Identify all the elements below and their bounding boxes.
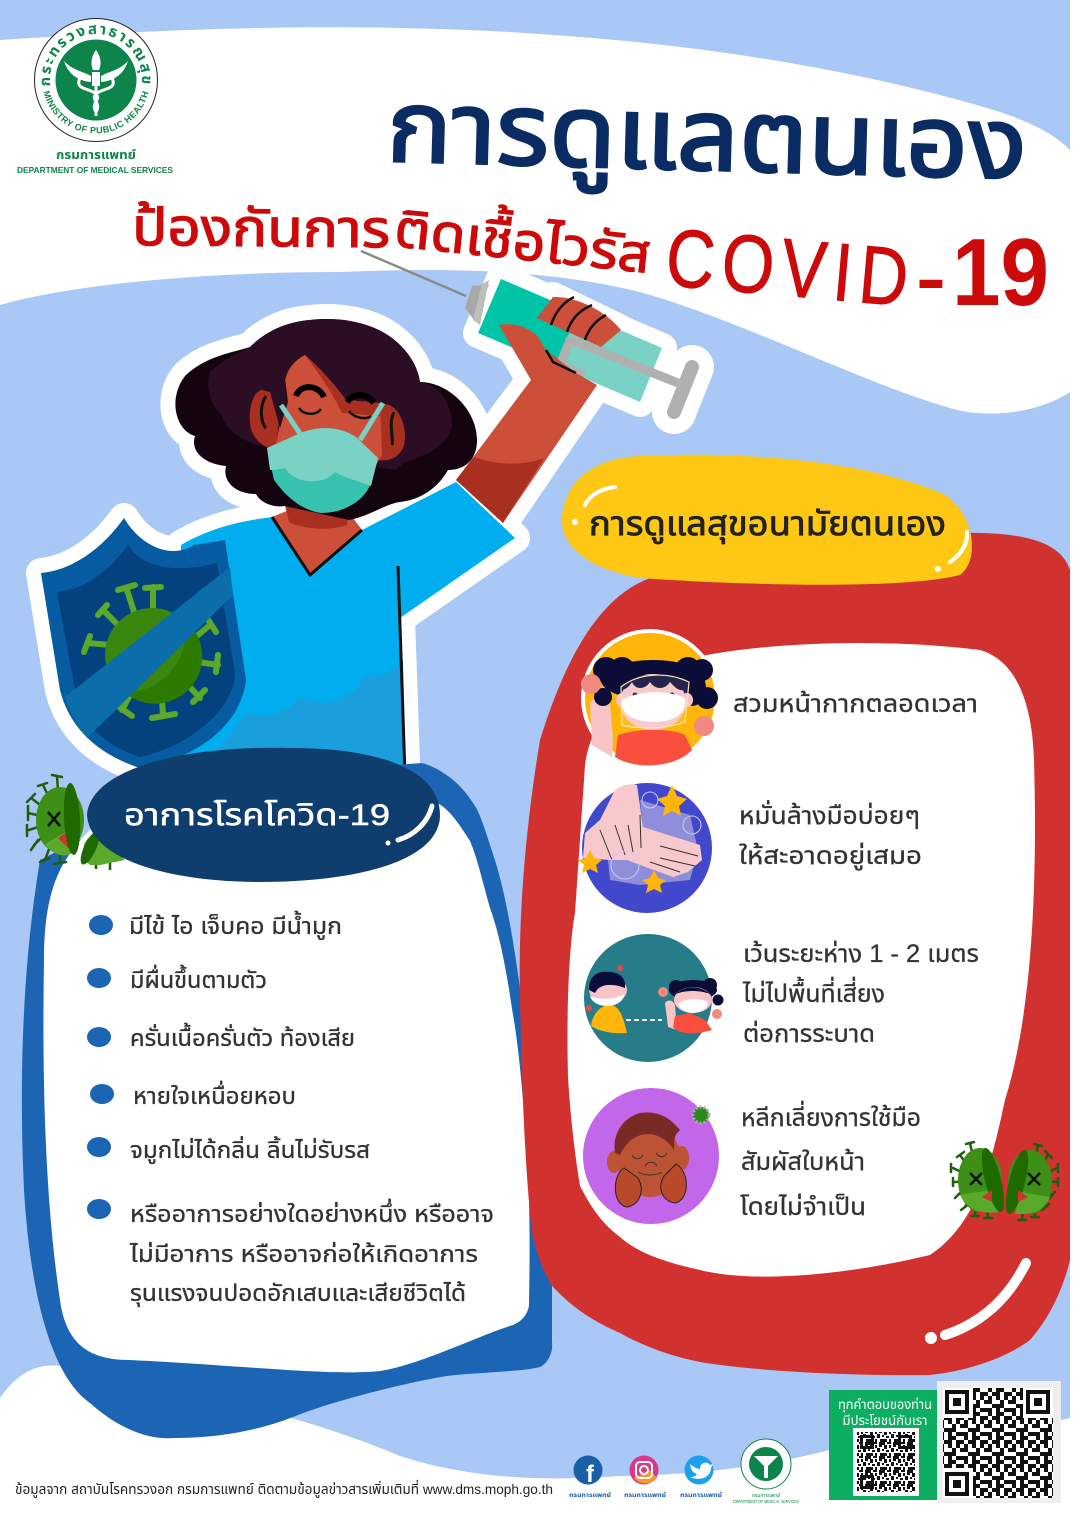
symptom 2: มีผื่นขึ้นตามตัว	[130, 964, 267, 993]
text: wash hands: ให้สะอาดอยู่เสมอ	[739, 842, 922, 871]
text: social distance: ไม่ไปพื้นที่เสี่ยง	[742, 976, 885, 1008]
text: avoid touching face	[740, 1100, 921, 1221]
symptom 1: มีไข้ ไอ เจ็บคอ มีน้ำมูก	[129, 910, 342, 941]
icon: syringe	[361, 251, 692, 412]
panel: white self-care card	[567, 643, 1035, 1277]
logo: ministry of public health: MINISTRY OF PUBLIC HEALTH	[44, 90, 148, 134]
title: main heading: การดูแลตนเอง	[385, 71, 1028, 206]
heading: symptoms	[87, 748, 440, 882]
heading: self-care pill: การดูแลสุขอนามัยตนเอง	[589, 505, 946, 544]
text: social distance: ต่อการระบาด	[743, 1020, 875, 1048]
heading: self-care pill	[562, 455, 972, 585]
highlight stroke on red panel	[925, 1263, 1026, 1344]
QR: feedback green card: มีประโยชน์กับเรา	[842, 1413, 928, 1428]
symptom 1	[89, 910, 342, 941]
icon: social distance	[584, 934, 724, 1062]
title: number 19: 19	[952, 219, 1049, 326]
symptom 2	[87, 964, 267, 993]
text: avoid touching face: สัมผัสใบหน้า	[741, 1148, 865, 1176]
footer source text: ข้อมูลจาก สถาบันโรคทรวงอก กรมการแพทย์ ติดตามข้อมูลข่าวสารเพิ่มเติมที่ www.dms.moph.go.th	[15, 1479, 553, 1498]
panel: red self-care background	[520, 533, 1070, 1375]
icon: face mask	[267, 403, 383, 513]
symptom 6	[87, 1198, 494, 1307]
arm	[456, 297, 621, 523]
top white wave	[0, 27, 1070, 414]
text: social distance	[742, 940, 979, 1048]
icon: broken virus left	[27, 775, 125, 870]
hair back	[175, 319, 477, 520]
virus spikes	[84, 585, 218, 718]
text: avoid touching face: หลีกเลี่ยงการใช้มือ	[741, 1100, 921, 1132]
body: blue scrubs	[180, 482, 515, 790]
icon: boy touching face	[583, 1088, 719, 1224]
face	[250, 355, 405, 475]
text: wash hands	[739, 799, 922, 871]
text: social distance: เว้นระยะห่าง 1 - 2 เมตร	[743, 940, 979, 968]
title: covid: COVID	[662, 211, 919, 324]
icon: twitter	[680, 1456, 722, 1499]
title: hyphen: -	[916, 239, 946, 317]
sticker outline	[41, 279, 692, 790]
icon: facebook	[569, 1456, 611, 1499]
title: subtitle thai part 2: ติดเชื้อไวรัส	[392, 193, 654, 285]
logo: ministry of public health	[17, 18, 173, 175]
QR: large code	[937, 1381, 1061, 1503]
symptom 6: ไม่มีอาการ หรืออาจก่อให้เกิดอาการ	[129, 1241, 478, 1267]
figure: nurse with syringe and shield	[41, 251, 692, 790]
icon: girl with face shield	[581, 629, 719, 767]
icon: instagram: กรมการแพทย์	[624, 1491, 666, 1499]
logo: small department logo	[733, 1439, 799, 1504]
icon: washing hands	[578, 783, 712, 913]
bottom white wave	[0, 1366, 1070, 1513]
panel: blue symptoms background	[22, 763, 552, 1438]
text: wear mask: สวมหน้ากากตลอดเวลา	[733, 690, 978, 718]
symptom 5: จมูกไม่ได้กลิ่น ลิ้นไม่รับรส	[130, 1135, 370, 1165]
icon: facebook: กรมการแพทย์	[569, 1491, 611, 1499]
heading: symptoms: อาการโรคโควิด-19	[124, 799, 390, 832]
icon: broken virus right	[951, 1142, 1058, 1220]
title: subtitle thai part 1: ป้องกันการ	[132, 199, 390, 259]
QR: feedback green card	[829, 1390, 944, 1503]
icon: twitter: กรมการแพทย์	[680, 1491, 722, 1499]
symptom 3: ครั่นเนื้อครั่นตัว ท้องเสีย	[130, 1022, 355, 1051]
icon: shield with virus	[41, 518, 246, 768]
logo: small department logo: กรมการแพทย์	[752, 1493, 780, 1499]
logo: ministry of public health: กรมการแพทย์	[56, 148, 136, 162]
text: avoid touching face: โดยไม่จำเป็น	[740, 1193, 866, 1221]
icon: instagram	[624, 1456, 666, 1499]
symptom 4: หายใจเหนื่อยหอบ	[133, 1080, 296, 1109]
icon: facebook: f	[586, 1461, 595, 1488]
QR: feedback green card: ทุกคำตอบของท่าน	[838, 1397, 932, 1412]
hair front	[208, 319, 452, 470]
symptom 4	[90, 1080, 296, 1109]
logo: small department logo: DEPARTMENT OF MEDICAL SERVICES	[733, 1499, 799, 1504]
right white strip	[1070, 0, 1081, 1513]
text: wash hands: หมั่นล้างมือบ่อยๆ	[739, 799, 920, 830]
logo: ministry of public health: กระทรวงสาธารณสุข	[42, 25, 150, 86]
symptom 6: หรืออาการอย่างใดอย่างหนึ่ง หรืออาจ	[130, 1198, 494, 1227]
list: symptoms	[87, 910, 494, 1307]
logo: ministry of public health: DEPARTMENT OF MEDICAL SERVICES	[17, 165, 173, 175]
panel: white symptoms card	[43, 800, 530, 1372]
symptom 6: รุนแรงจนปอดอักเสบและเสียชีวิตได้	[130, 1280, 466, 1307]
